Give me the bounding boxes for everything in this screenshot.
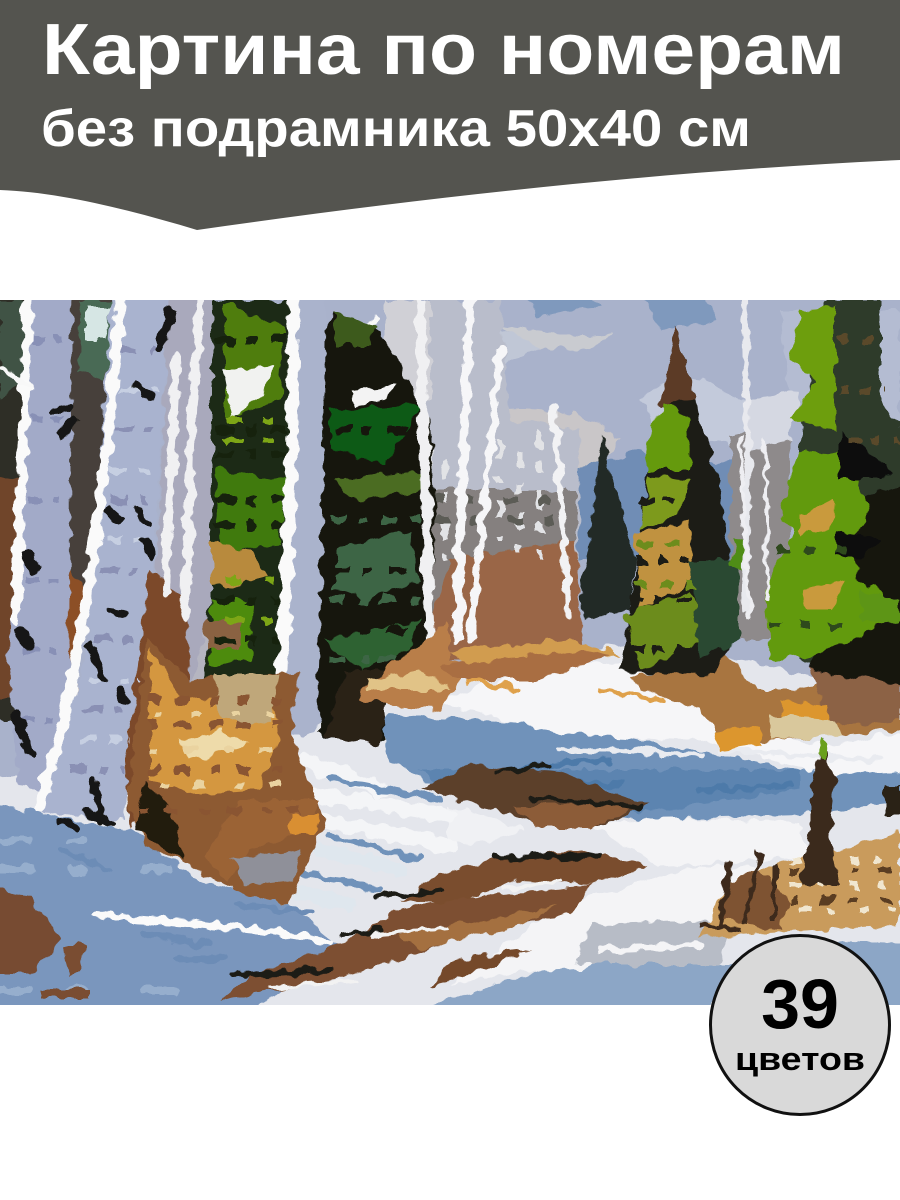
badge label: цветов bbox=[735, 1041, 865, 1077]
spruce right centre bbox=[620, 325, 745, 675]
small far spruce bbox=[580, 430, 635, 620]
left dark forest and birches bbox=[0, 280, 212, 830]
background forest bbox=[192, 300, 800, 681]
large spruce right bbox=[765, 300, 900, 690]
title: Картина по номерам bbox=[42, 10, 845, 90]
golden grass bbox=[0, 620, 900, 998]
badge: 39 colours bbox=[710, 936, 890, 1114]
spruce behind left bbox=[202, 300, 291, 678]
central birch bbox=[272, 280, 430, 735]
subtitle: без подрамника 50х40 см bbox=[41, 100, 751, 158]
thin background birches bbox=[458, 300, 768, 640]
small foreground spruce and twigs bbox=[700, 740, 900, 930]
dark spruce bbox=[318, 312, 435, 745]
painting: winter forest with stream bbox=[0, 270, 900, 1035]
birch highlights and black marks bbox=[0, 290, 375, 825]
snow ground bbox=[0, 640, 900, 1035]
badge number: 39 bbox=[761, 965, 839, 1043]
sky bbox=[0, 300, 900, 778]
header banner bbox=[0, 0, 900, 230]
striped sunlit snow bbox=[0, 680, 880, 990]
stream bbox=[220, 765, 650, 1000]
